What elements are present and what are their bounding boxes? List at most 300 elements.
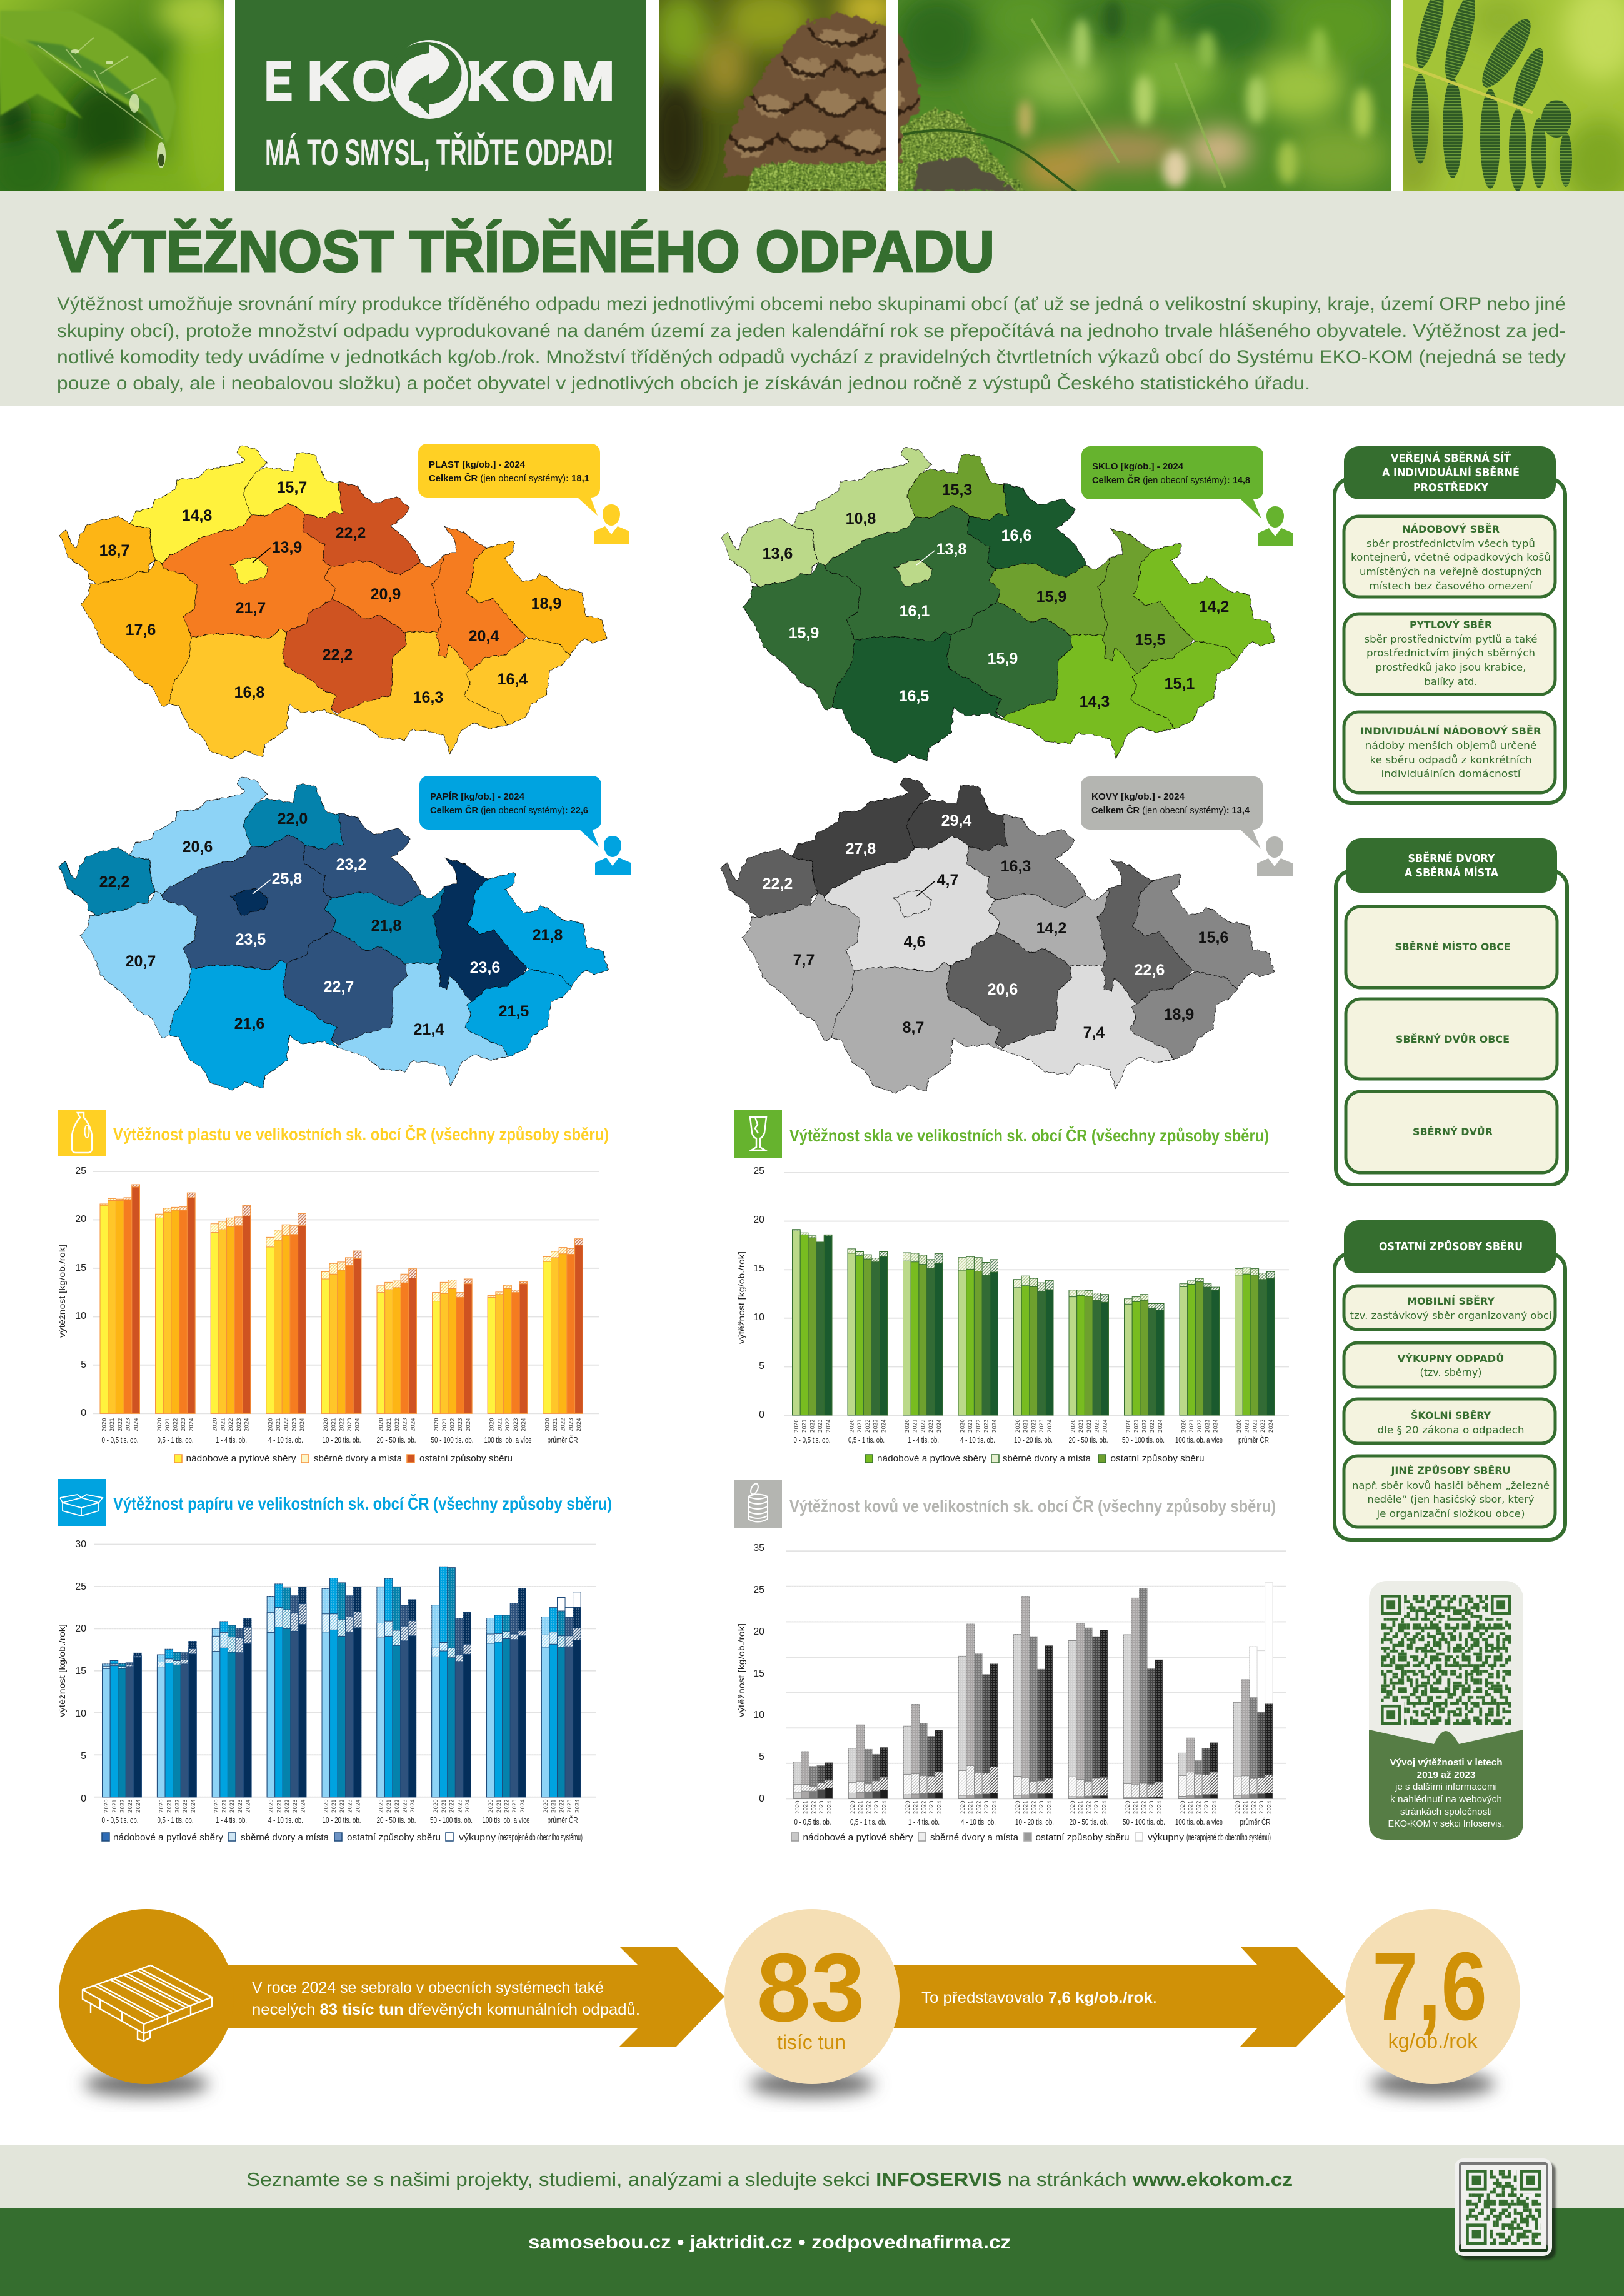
group labels: 0 - 0,5 tis. ob. xyxy=(101,1435,139,1445)
map: sklo: 16,1 xyxy=(900,603,930,620)
year labels: 2024 xyxy=(191,1799,197,1813)
y axis ticks: 30 xyxy=(75,1539,86,1550)
y axis title: výtěžnost [kg/ob./rok] xyxy=(736,1251,746,1344)
map: papír: 21,8 xyxy=(533,926,563,944)
panel: sběrné dvory xyxy=(1336,838,1567,1185)
year labels: 2020 xyxy=(1236,1419,1243,1433)
panel heading xyxy=(1346,838,1557,893)
callout: papír: PAPÍR [kg/ob.] - 2024 xyxy=(430,791,525,802)
intro paragraph: Výtěžnost umožňuje srovnání míry produkce tříděného odpadu mezi jednotlivými obcemi nebo skupinami obcí (ať už se jedná o velikostní skupiny, kraje, území ORP nebo jiné xyxy=(57,294,1566,314)
footer: infoservis band xyxy=(0,2145,1624,2209)
map: kovy xyxy=(721,778,1274,1093)
map: kovy: 22,2 xyxy=(763,875,793,893)
year labels: 2023 xyxy=(1205,1419,1211,1433)
year labels: 2022 xyxy=(174,1799,181,1813)
year labels: 2020 xyxy=(434,1418,440,1431)
year labels: 2022 xyxy=(173,1418,179,1431)
year labels: 2020 xyxy=(849,1419,855,1433)
year labels: 2021 xyxy=(553,1418,559,1431)
chart: papír xyxy=(57,1479,612,1843)
legend: nádobové a pytlové sběry xyxy=(113,1832,224,1843)
bars: sběrné dvory a místa xyxy=(793,1766,1273,1799)
year labels: 2021 xyxy=(913,1419,919,1433)
circle: 83 tisíc tun: tisíc tun xyxy=(777,2031,846,2053)
map: papír: 21,4 xyxy=(414,1021,444,1038)
arrow text: necelých 83 tisíc tun dřevěných komunálních odpadů. xyxy=(252,2001,640,2018)
circle: 83 tisíc tun: 83 xyxy=(756,1933,865,2042)
circle: 7,6 kg/ob./rok xyxy=(1345,1909,1520,2084)
y axis ticks: 10 xyxy=(753,1710,764,1720)
legend: (nezapojené do obecního systému) xyxy=(498,1832,583,1843)
map: kovy: 14,2 xyxy=(1036,920,1066,937)
year labels: 2024 xyxy=(300,1799,306,1813)
box: nádobový sběr: sběr prostřednictvím všech typů xyxy=(1366,538,1535,549)
QR caption: je s dalšími informacemi xyxy=(1395,1782,1497,1792)
year labels: 2023 xyxy=(568,1418,574,1431)
map: sklo: 10,8 xyxy=(846,510,876,528)
map: kovy: 18,9 xyxy=(1164,1006,1194,1023)
year labels: 2023 xyxy=(126,1418,132,1431)
group labels: 100 tis. ob. a více xyxy=(483,1815,530,1825)
year labels: 2024 xyxy=(576,1418,583,1431)
year labels: 2021 xyxy=(165,1418,171,1431)
year labels: 2024 xyxy=(133,1418,139,1431)
bars: nádobové a pytlové sběry xyxy=(100,1187,583,1413)
year labels: 2022 xyxy=(921,1800,927,1814)
year labels: 2022 xyxy=(561,1418,567,1431)
group labels: průměr ČR xyxy=(1238,1435,1269,1445)
year labels: 2020 xyxy=(213,1418,219,1431)
intro paragraph: pouze o obaly, ale i neobalovou složku) a počet obyvatel v jednotlivých obcích je získáván jednou ročně z výstupů Českého statistického úřadu. xyxy=(57,373,1310,394)
year labels: 2022 xyxy=(866,1800,872,1814)
chart title: Výtěžnost kovů ve velikostních sk. obcí ČR (všechny způsoby sběru) xyxy=(789,1496,1276,1516)
year labels: 2021 xyxy=(222,1799,228,1813)
group labels: 50 - 100 tis. ob. xyxy=(431,1435,474,1445)
box: mobilní sběry: tzv. zastávkový sběr organizovaný obcí xyxy=(1350,1310,1552,1321)
year labels: 2021 xyxy=(112,1799,118,1813)
map: papír: 20,7 xyxy=(126,953,156,970)
year labels: 2022 xyxy=(120,1799,126,1813)
panel heading: VEŘEJNÁ SBĚRNÁ SÍŤ xyxy=(1391,451,1511,465)
year labels: 2022 xyxy=(504,1799,510,1813)
y axis ticks xyxy=(753,1543,764,1804)
map: papír: 25,8 xyxy=(272,870,302,888)
box: výkupny odpadů: VÝKUPNY ODPADŮ xyxy=(1398,1353,1504,1365)
map: papír: 22,7 xyxy=(324,978,354,996)
year labels: 2023 xyxy=(402,1799,408,1813)
year labels: 2022 xyxy=(811,1800,817,1814)
map: sklo: 16,6 xyxy=(1001,527,1031,544)
year labels: 2024 xyxy=(355,1418,361,1431)
map: kovy: 27,8 xyxy=(846,840,876,858)
group labels: 10 - 20 tis. ob. xyxy=(1015,1817,1054,1827)
year labels: 2021 xyxy=(386,1418,393,1431)
map: kovy: 29,4 xyxy=(941,812,971,830)
year labels: 2024 xyxy=(1047,1800,1053,1814)
year labels: 2023 xyxy=(873,1419,880,1433)
group labels: průměr ČR xyxy=(548,1815,578,1825)
group labels: 100 tis. ob. a více xyxy=(1175,1817,1223,1827)
year labels xyxy=(795,1800,1273,1814)
y axis ticks xyxy=(753,1166,764,1420)
year labels: 2022 xyxy=(449,1418,456,1431)
photo: fern xyxy=(1403,0,1624,191)
icon: broken glass xyxy=(734,1110,782,1158)
logo wordmark: M xyxy=(561,49,615,112)
group labels: 1 - 4 tis. ob. xyxy=(216,1815,247,1825)
year labels: 2023 xyxy=(929,1800,935,1814)
year labels: 2021 xyxy=(802,1419,808,1433)
year labels: 2021 xyxy=(1023,1800,1030,1814)
year labels: 2023 xyxy=(512,1799,518,1813)
year labels: 2024 xyxy=(189,1418,195,1431)
map: kovy: 20,6 xyxy=(988,981,1018,998)
year labels: 2020 xyxy=(850,1800,856,1814)
map: papír: 22,0 xyxy=(278,810,308,828)
year labels: 2021 xyxy=(913,1800,920,1814)
chart: kovy xyxy=(734,1480,1286,1843)
header band xyxy=(0,191,1624,406)
group labels: průměr ČR xyxy=(548,1435,578,1445)
year labels: 2023 xyxy=(1094,1800,1100,1814)
group labels: 100 tis. ob. a více xyxy=(1175,1435,1223,1445)
year labels: 2023 xyxy=(1039,1419,1045,1433)
year labels: 2020 xyxy=(379,1418,385,1431)
legend: sběrné dvory a místa xyxy=(241,1832,329,1843)
group labels: 50 - 100 tis. ob. xyxy=(1122,1435,1165,1445)
map: sklo: 14,3 xyxy=(1080,693,1110,711)
year labels: 2022 xyxy=(976,1800,982,1814)
year labels: 2024 xyxy=(881,1419,887,1433)
map: papír: 21,5 xyxy=(499,1003,529,1020)
legend: nádobové a pytlové sběry xyxy=(186,1453,296,1464)
box: jiné způsoby sběru xyxy=(1344,1456,1555,1527)
year labels: 2024 xyxy=(826,1419,832,1433)
year labels: 2022 xyxy=(339,1799,346,1813)
chart title: Výtěžnost papíru ve velikostních sk. obcí ČR (všechny způsoby sběru) xyxy=(113,1493,612,1513)
year labels: 2022 xyxy=(809,1419,816,1433)
year labels: 2023 xyxy=(238,1799,244,1813)
group labels xyxy=(101,1815,578,1825)
shadows under circles xyxy=(84,2072,1495,2097)
bars: ostatní způsoby sběru xyxy=(103,1567,581,1797)
year labels: 2020 xyxy=(960,1419,966,1433)
map: plast: 16,4 xyxy=(498,671,528,688)
year labels: 2021 xyxy=(1245,1419,1251,1433)
group labels xyxy=(794,1817,1270,1827)
box: pytlový sběr: balíky atd. xyxy=(1424,676,1478,688)
arrow: 83 to 7,6 xyxy=(888,1947,1345,2047)
map: papír: 23,5 xyxy=(236,931,266,948)
box: jiné způsoby sběru: např. sběr kovů hasiči během „železné xyxy=(1352,1480,1550,1491)
year labels: 2024 xyxy=(1212,1800,1218,1814)
year labels: 2023 xyxy=(457,1799,463,1813)
box: pytlový sběr xyxy=(1344,614,1555,694)
box: školní sběry: ŠKOLNÍ SBĚRY xyxy=(1411,1410,1491,1421)
legend: výkupny xyxy=(459,1832,496,1843)
year labels xyxy=(794,1419,1275,1433)
year labels: 2024 xyxy=(1047,1419,1053,1433)
map: plast: 22,2 xyxy=(336,524,366,542)
map: kovy: 4,6 xyxy=(904,933,925,951)
bars: výkupny outline xyxy=(558,1592,581,1797)
year labels: 2021 xyxy=(331,1418,338,1431)
box: výkupny odpadů: (tzv. sběrny) xyxy=(1420,1366,1481,1378)
map: sklo: 15,9 xyxy=(789,624,819,642)
year labels: 2024 xyxy=(992,1800,998,1814)
map: kovy: 16,3 xyxy=(1001,858,1031,875)
group labels: 20 - 50 tis. ob. xyxy=(376,1435,416,1445)
logo wordmark: O xyxy=(352,49,397,112)
box: jiné způsoby sběru: je organizační složkou obce) xyxy=(1376,1508,1525,1520)
year labels: 2023 xyxy=(181,1418,187,1431)
group labels: 1 - 4 tis. ob. xyxy=(216,1435,247,1445)
map: plast: 13,9 xyxy=(272,539,302,556)
icon: person xyxy=(1257,836,1293,876)
year labels: 2024 xyxy=(1213,1419,1219,1433)
box: individuální nádobový sběr: ke sběru odpadů z konkrétních xyxy=(1370,754,1531,766)
circle: 7,6 kg/ob./rok: 7,6 xyxy=(1372,1932,1487,2040)
year labels: 2022 xyxy=(1086,1419,1093,1433)
group labels: 20 - 50 tis. ob. xyxy=(376,1815,416,1825)
y axis ticks: 20 xyxy=(75,1623,86,1634)
map: sklo: 15,9 xyxy=(988,650,1018,668)
QR code xyxy=(1381,1595,1511,1725)
year labels: 2020 xyxy=(101,1418,108,1431)
y axis ticks: 0 xyxy=(759,1793,764,1804)
map: plast: 22,2 xyxy=(323,646,353,664)
bars: sběrné dvory a ostatní xyxy=(100,1185,583,1413)
year labels: 2024 xyxy=(466,1418,472,1431)
legend: nádobové a pytlové sběry xyxy=(877,1453,987,1464)
year labels: 2022 xyxy=(1031,1800,1037,1814)
chart title: Výtěžnost plastu ve velikostních sk. obcí ČR (všechny způsoby sběru) xyxy=(113,1124,609,1144)
year labels: 2020 xyxy=(378,1799,384,1813)
footer: infoservis band: Seznamte se s našimi projekty, studiemi, analýzami a sledujte sekci INFOSERVIS na stránkách www.ekokom.cz xyxy=(246,2168,1293,2190)
box: jiné způsoby sběru: neděle“ (jen hasičský sbor, který xyxy=(1368,1493,1534,1505)
bars: ostatní způsoby sběru xyxy=(793,1588,1273,1799)
arrow text xyxy=(252,1979,640,2018)
year labels: 2020 xyxy=(323,1418,329,1431)
legend: výkupny xyxy=(1148,1832,1185,1843)
group labels: 4 - 10 tis. ob. xyxy=(960,1435,995,1445)
year labels: 2023 xyxy=(293,1799,299,1813)
y axis title: výtěžnost [kg/ob./rok] xyxy=(57,1624,67,1717)
panel heading: A SBĚRNÁ MÍSTA xyxy=(1405,866,1498,880)
year labels: 2024 xyxy=(1268,1419,1275,1433)
y axis ticks: 15 xyxy=(753,1668,764,1679)
panel heading: OSTATNÍ ZPŮSOBY SBĚRU xyxy=(1379,1239,1523,1253)
year labels: 2024 xyxy=(1158,1419,1164,1433)
map: sklo: 15,9 xyxy=(1036,588,1066,606)
group labels: 20 - 50 tis. ob. xyxy=(1069,1817,1109,1827)
year labels: 2021 xyxy=(551,1799,558,1813)
chart: sklo xyxy=(734,1110,1289,1464)
legend: ostatní způsoby sběru xyxy=(1110,1453,1204,1464)
year labels: 2022 xyxy=(1251,1800,1257,1814)
box: nádobový sběr: NÁDOBOVÝ SBĚR xyxy=(1402,523,1500,535)
map: sklo: 15,3 xyxy=(942,481,972,499)
y axis ticks: 25 xyxy=(753,1166,764,1176)
arrow text: V roce 2024 se sebralo v obecních systémech také xyxy=(252,1979,604,1997)
intro paragraph: notlivé komodity tedy uvádíme v jednotkách kg/ob./rok. Množství tříděných odpadů vychází z pravidelných čtvrtletních výkazů obcí do Systému EKO-KOM (nejedná se tedy xyxy=(57,347,1566,368)
map: kovy: 22,6 xyxy=(1135,961,1165,979)
year labels: 2022 xyxy=(1196,1800,1202,1814)
year labels: 2022 xyxy=(228,1418,234,1431)
group labels: 20 - 50 tis. ob. xyxy=(1069,1435,1108,1445)
slogan: MÁ TO SMYSL, TŘIĎTE ODPAD! xyxy=(265,133,614,173)
group labels: 0,5 - 1 tis. ob. xyxy=(848,1435,885,1445)
year labels: 2020 xyxy=(794,1419,800,1433)
legend: nádobové a pytlové sběry xyxy=(803,1832,913,1843)
map: papír: 23,2 xyxy=(336,856,366,873)
year labels: 2022 xyxy=(976,1419,982,1433)
box: nádobový sběr: místech bez časového omezení xyxy=(1369,580,1533,592)
year labels: 2021 xyxy=(857,1419,863,1433)
year labels: 2021 xyxy=(968,1800,975,1814)
callout: kovy: KOVY [kg/ob.] - 2024 xyxy=(1091,791,1185,802)
year labels: 2021 xyxy=(1134,1419,1140,1433)
box: individuální nádobový sběr: INDIVIDUÁLNÍ NÁDOBOVÝ SBĚR xyxy=(1360,725,1541,737)
group labels xyxy=(101,1435,578,1445)
logo: green dot arrows xyxy=(388,37,471,122)
box: nádobový sběr: umístěných na veřejně dostupných xyxy=(1360,566,1542,578)
box: nádobový sběr xyxy=(1344,516,1555,597)
y axis ticks: 15 xyxy=(75,1666,86,1677)
legend xyxy=(102,1832,583,1843)
arrow: pallet to 83 xyxy=(213,1947,724,2047)
year labels: 2020 xyxy=(1015,1800,1021,1814)
map: plast: 20,9 xyxy=(371,586,401,603)
map: sklo xyxy=(721,447,1275,763)
icon: pallet xyxy=(83,1965,212,2041)
year labels: 2023 xyxy=(236,1418,243,1431)
callout: plast: PLAST [kg/ob.] - 2024 xyxy=(429,459,526,470)
group labels: 100 tis. ob. a více xyxy=(484,1435,531,1445)
map: kovy: 7,4 xyxy=(1083,1024,1105,1041)
year labels: 2021 xyxy=(1189,1419,1195,1433)
icon: bottle xyxy=(58,1110,106,1156)
year labels: 2021 xyxy=(167,1799,173,1813)
legend xyxy=(174,1453,513,1464)
year labels: 2024 xyxy=(520,1799,526,1813)
y axis ticks: 5 xyxy=(759,1361,764,1371)
QR caption: 2019 až 2023 xyxy=(1416,1770,1475,1780)
map: sklo: 14,2 xyxy=(1199,598,1229,616)
group labels: 10 - 20 tis. ob. xyxy=(323,1815,361,1825)
year labels: 2024 xyxy=(244,1418,250,1431)
box: individuální nádobový sběr xyxy=(1344,712,1555,793)
year labels: 2023 xyxy=(567,1799,573,1813)
map: papír: 23,6 xyxy=(470,959,500,976)
year labels: 2023 xyxy=(819,1800,825,1814)
y axis ticks: 25 xyxy=(75,1166,86,1176)
chart title: Výtěžnost skla ve velikostních sk. obcí ČR (všechny způsoby sběru) xyxy=(789,1125,1269,1145)
legend: sběrné dvory a místa xyxy=(930,1832,1019,1843)
icon: person xyxy=(594,504,629,544)
y axis ticks: 20 xyxy=(753,1215,764,1225)
legend: (nezapojené do obecního systému) xyxy=(1186,1832,1271,1843)
y axis ticks: 10 xyxy=(75,1708,86,1719)
year labels: 2021 xyxy=(1243,1800,1250,1814)
year labels: 2021 xyxy=(220,1418,226,1431)
map: plast: 16,3 xyxy=(413,689,443,706)
year labels: 2020 xyxy=(159,1799,165,1813)
year labels: 2021 xyxy=(858,1800,865,1814)
year labels: 2022 xyxy=(1141,1419,1148,1433)
y axis ticks: 5 xyxy=(81,1360,86,1370)
year labels: 2023 xyxy=(1039,1800,1045,1814)
y axis ticks: 0 xyxy=(759,1410,764,1420)
panel: ostatní způsoby sběru xyxy=(1335,1220,1565,1540)
logo wordmark: K xyxy=(307,49,349,112)
year labels: 2021 xyxy=(276,1418,282,1431)
group labels: 0 - 0,5 tis. ob. xyxy=(794,1817,831,1827)
group labels: 1 - 4 tis. ob. xyxy=(908,1435,939,1445)
map: papír: 22,2 xyxy=(99,873,129,891)
y axis ticks: 10 xyxy=(753,1312,764,1323)
box: individuální nádobový sběr: individuálních domácností xyxy=(1381,768,1521,780)
year labels xyxy=(101,1418,583,1431)
map: sklo: 16,5 xyxy=(899,688,929,705)
group labels: 10 - 20 tis. ob. xyxy=(323,1435,361,1445)
map: papír: 21,8 xyxy=(371,917,401,935)
callout: sklo: SKLO [kg/ob.] - 2024 xyxy=(1092,461,1184,472)
year labels: 2022 xyxy=(920,1419,926,1433)
y axis ticks: 10 xyxy=(75,1311,86,1321)
year labels: 2024 xyxy=(1102,1419,1108,1433)
callout: sklo: Celkem ČR (jen obecní systémy): 14,8 xyxy=(1092,474,1250,486)
legend: sběrné dvory a místa xyxy=(1003,1453,1091,1464)
year labels: 2020 xyxy=(905,1419,911,1433)
bars: sběrné dvory a místa xyxy=(103,1604,581,1797)
group labels: 1 - 4 tis. ob. xyxy=(908,1817,940,1827)
year labels: 2020 xyxy=(905,1800,911,1814)
group labels: 0,5 - 1 tis. ob. xyxy=(850,1817,886,1827)
year labels: 2023 xyxy=(928,1419,935,1433)
box: mobilní sběry xyxy=(1344,1286,1555,1330)
QR caption: Vývoj výtěžnosti v letech xyxy=(1390,1757,1503,1768)
box: sběrný dvůr obce xyxy=(1346,999,1557,1079)
year labels: 2023 xyxy=(183,1799,189,1813)
year labels: 2021 xyxy=(1133,1800,1140,1814)
pine cone scales across the two photos xyxy=(725,13,922,176)
year labels: 2021 xyxy=(1188,1800,1195,1814)
legend: sběrné dvory a místa xyxy=(314,1453,403,1464)
callout: sklo xyxy=(1081,446,1293,546)
map: plast: 14,8 xyxy=(182,507,212,524)
y axis ticks: 5 xyxy=(759,1752,764,1762)
legend xyxy=(865,1453,1204,1464)
year labels: 2020 xyxy=(1126,1419,1132,1433)
year labels: 2024 xyxy=(299,1418,306,1431)
year labels: 2021 xyxy=(1078,1800,1085,1814)
year labels: 2022 xyxy=(284,1799,291,1813)
photo: forest grass and moss xyxy=(894,0,1391,195)
year labels: 2020 xyxy=(433,1799,439,1813)
year labels: 2024 xyxy=(410,1799,416,1813)
group labels xyxy=(794,1435,1269,1445)
year labels: 2021 xyxy=(1023,1419,1030,1433)
year labels: 2024 xyxy=(136,1799,142,1813)
year labels: 2023 xyxy=(513,1418,519,1431)
box: školní sběry: dle § 20 zákona o odpadech xyxy=(1378,1424,1524,1436)
box: sběrné místo obce xyxy=(1346,906,1557,988)
y axis ticks: 20 xyxy=(753,1627,764,1637)
year labels: 2021 xyxy=(497,1418,503,1431)
map: plast: 18,7 xyxy=(99,542,129,559)
map: plast: 20,4 xyxy=(469,628,499,645)
